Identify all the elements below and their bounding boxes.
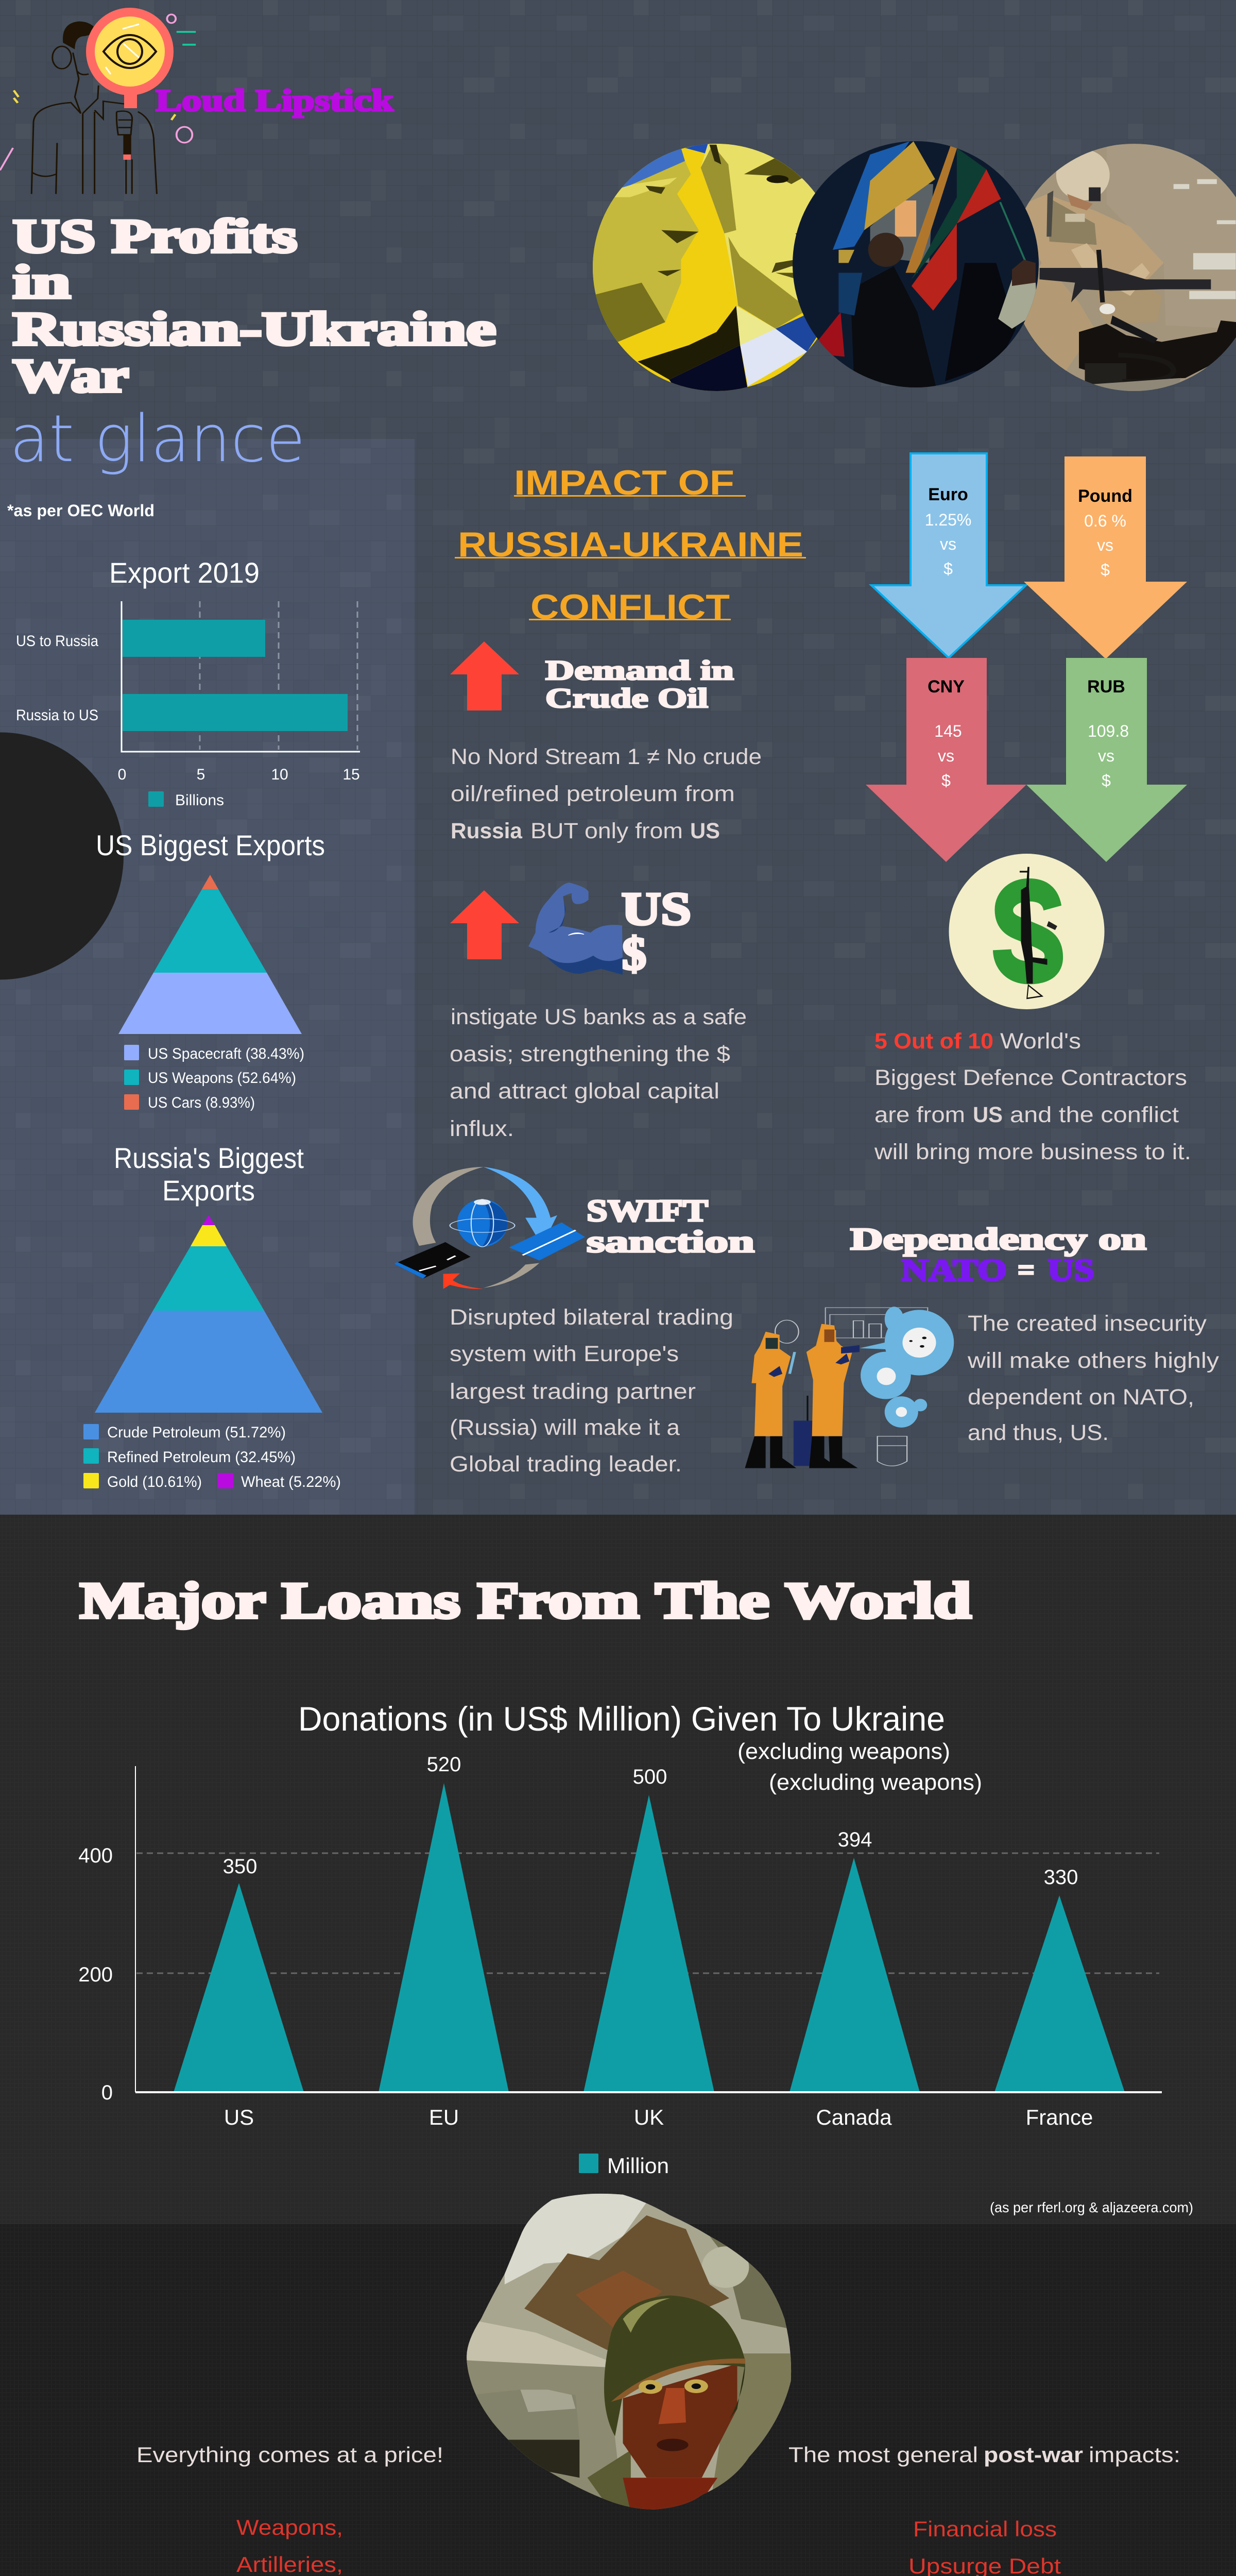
text: defence contractors: will bring more business to it. [874,1140,1191,1164]
photo: soldier painting [461,2191,796,2512]
arrow: euro: vs [940,535,956,553]
chart title: US Biggest Exports [96,829,325,861]
text: crude oil: oil/refined petroleum from [451,782,735,806]
list: costs of support: Weapons, [236,2515,343,2539]
heading: demand in crude oil [545,655,734,714]
legend: Gold (10.61%) [107,1473,202,1490]
arrow: dollar strength up [450,890,519,959]
chart: donations to Ukraine: Canada [816,2105,892,2129]
photo: protest flags [791,139,1043,392]
heading: swift sanction: sanction [587,1225,754,1259]
chart title: Donations (in US$ Million) Given To Ukraine [298,1700,945,1738]
text: crude oil: No Nord Stream 1 ≠ No crude [451,744,762,769]
arrow: cny: $ [941,771,951,790]
heading: dependency on nato: = [1018,1253,1035,1287]
chart: US biggest exports pyramid [96,829,325,1111]
text: defence contractors: US [973,1103,1003,1127]
chart: donations to Ukraine: (excluding weapons) [737,1739,950,1764]
decorative black circle [0,733,124,980]
source note: *as per OEC World [7,501,154,520]
heading: US dollar: $ [622,928,646,979]
legend: Million [607,2154,669,2178]
text: dependency on nato: and thus, US. [968,1420,1109,1445]
arrow: rub: $ [1102,771,1111,790]
chart title [114,1142,304,1207]
chart: export 2019: 0 [118,766,126,783]
text: safe oasis: and attract global capital [450,1079,719,1104]
arrow: euro: 1.25% [925,511,971,529]
chart: export 2019: 15 [342,766,360,783]
chart: donations to Ukraine: 400 [78,1844,113,1867]
chart: donations to Ukraine: France [1026,2105,1093,2129]
legend: US Cars (8.93%) [148,1094,255,1111]
text: everything comes at a price: Everything comes at a price! [136,2443,443,2467]
arrow: euro: $ [943,560,953,578]
arrow: pound: $ [1101,561,1110,579]
chart title: Exports [162,1174,255,1207]
brand name: Loud Lipstick [156,83,394,117]
bar: US [174,1883,304,2092]
list: costs of support [76,2515,502,2576]
heading: dependency on nato: NATO [901,1253,1007,1287]
panel: left statistics background [0,439,415,1515]
text: crude oil: Russia [451,819,523,843]
legend: Crude Petroleum (51.72%) [107,1424,286,1441]
text: defence contractors: 5 Out of 10 [874,1029,993,1054]
logo: person with magnifier [0,8,196,194]
text: swift sanction: system with Europe's [450,1342,679,1366]
photo: soldier [1004,144,1236,393]
heading: major loans from the world: Major Loans From The World [80,1572,971,1629]
chart: donations to Ukraine [78,1700,1162,2178]
text: dependency on nato: dependent on NATO, [968,1385,1194,1410]
arrow: cny: vs [938,747,954,765]
icon: hazmat workers and viruses [745,1307,954,1468]
heading: dependency on nato [850,1222,1146,1287]
legend [124,1045,304,1111]
heading: US dollar: US [622,884,691,935]
bar: UK [583,1795,714,2092]
list: costs of support: Artilleries, [236,2552,343,2576]
chart title: Export 2019 [109,556,260,589]
arrow: cny: 145 [934,722,962,740]
source note: (as per rferl.org & aljazeera.com) [990,2199,1193,2215]
text: swift sanction: Disrupted bilateral trading [450,1305,733,1330]
bar: EU [379,1783,509,2092]
arrow: euro [871,453,1026,658]
chart: export 2019 [16,556,360,809]
text: dependency on nato [967,1311,1220,1445]
text: defence contractors [874,1029,1191,1164]
heading: dependency on nato: Dependency on [850,1222,1146,1256]
legend: Refined Petroleum (32.45%) [107,1449,296,1466]
chart: donations to Ukraine: 350 [223,1855,257,1878]
text: crude oil [451,744,762,843]
legend: Billions [175,792,224,809]
text: swift sanction [450,1305,733,1477]
heading: dependency on nato: US [1048,1253,1094,1287]
text: dependency on nato: will make others highly [967,1348,1220,1373]
legend: US Weapons (52.64%) [148,1070,296,1087]
legend: US Spacecraft (38.43%) [148,1045,304,1062]
legend [148,791,224,809]
arrow: pound: 0.6 % [1084,512,1126,530]
text: defence contractors: World's [1000,1029,1081,1054]
heading: impact of conflict: RUSSIA-UKRAINE [458,525,803,564]
chart: donations to Ukraine: (excluding weapons) [769,1770,982,1795]
icon: dollar sign with rifle [949,854,1104,1009]
arrow: cny: CNY [928,677,965,697]
title: in [13,256,71,308]
chart title: Russia's Biggest [114,1142,304,1174]
subtitle: at glance: at glance [10,401,305,477]
legend: Wheat (5.22%) [241,1473,341,1490]
heading: demand in crude oil: Crude Oil [545,683,708,714]
bar: Canada [789,1858,920,2092]
text: defence contractors: and the conflict [1010,1103,1179,1127]
text: dependency on nato: The created insecurity [968,1311,1207,1336]
list: post-war impacts: Financial loss [913,2517,1057,2541]
text: post-war impacts [788,2443,1180,2467]
chart: donations to Ukraine: 520 [427,1753,461,1776]
chart: export 2019: 10 [271,766,288,783]
text: post-war impacts: The most general [788,2443,978,2467]
heading: swift sanction [587,1194,754,1259]
title: US Profits [13,210,297,262]
legend [579,2154,669,2178]
arrow: pound [1024,456,1187,659]
text: post-war impacts: post-war [984,2443,1083,2467]
text: safe oasis: influx. [450,1116,514,1141]
arrow: pound: vs [1097,536,1113,554]
heading: swift sanction: SWIFT [587,1194,708,1228]
icon: flexed bicep [528,883,623,975]
arrow: rub: vs [1098,747,1114,765]
section background: loans [0,1515,1236,2224]
title [13,210,496,402]
text: safe oasis [450,1005,747,1141]
arrow: rub: RUB [1087,677,1125,697]
text: post-war impacts: impacts: [1089,2443,1180,2467]
title: Russian-Ukraine [13,302,496,355]
chart: export 2019: 5 [197,766,205,783]
chart: donations to Ukraine: 330 [1044,1866,1078,1889]
chart: donations to Ukraine: 0 [101,2081,113,2104]
legend [83,1424,341,1490]
icon: swift globe and cards [394,1167,585,1289]
heading: US dollar [622,884,691,979]
title: War [13,349,129,402]
photo: leaders portrait [593,144,818,391]
chart: donations to Ukraine: 394 [838,1828,872,1851]
arrow: rub [1026,658,1187,862]
section background: top overview [0,0,1236,1515]
chart: donations to Ukraine: 200 [78,1963,113,1986]
text: safe oasis: instigate US banks as a safe [451,1005,747,1029]
text: crude oil: BUT only from [530,819,683,843]
chart: Russia's biggest exports pyramid [83,1142,341,1490]
text: crude oil: US [690,819,720,843]
arrow: pound: Pound [1078,486,1132,506]
section background: price of war [0,2224,1236,2576]
chart: export 2019: US to Russia [16,633,98,650]
arrow: rub: 109.8 [1088,722,1129,740]
text: swift sanction: (Russia) will make it a [450,1415,680,1440]
arrow: crude oil demand up [450,641,519,710]
chart: donations to Ukraine: US [224,2105,254,2129]
bar: US to Russia [123,620,265,657]
chart: donations to Ukraine: EU [429,2105,459,2129]
heading: impact of conflict [455,463,806,626]
bar: Russia to US [123,694,348,731]
chart: donations to Ukraine: UK [634,2105,664,2129]
list: post-war impacts [876,2517,1095,2576]
heading: impact of conflict: CONFLICT [530,587,730,626]
text: swift sanction: Global trading leader. [450,1452,682,1477]
heading: demand in crude oil: Demand in [545,655,734,686]
bar: France [994,1895,1125,2092]
text: swift sanction: largest trading partner [450,1379,696,1404]
chart: donations to Ukraine: 500 [633,1766,667,1788]
text: defence contractors: Biggest Defence Contractors [874,1065,1187,1090]
heading: impact of conflict: IMPACT OF [514,463,734,502]
chart: export 2019: Russia to US [16,707,98,724]
text: defence contractors: are from [874,1103,965,1127]
text: safe oasis: oasis; strengthening the $ [450,1042,730,1066]
arrow: euro: Euro [928,485,968,504]
arrow: cny [866,658,1026,862]
